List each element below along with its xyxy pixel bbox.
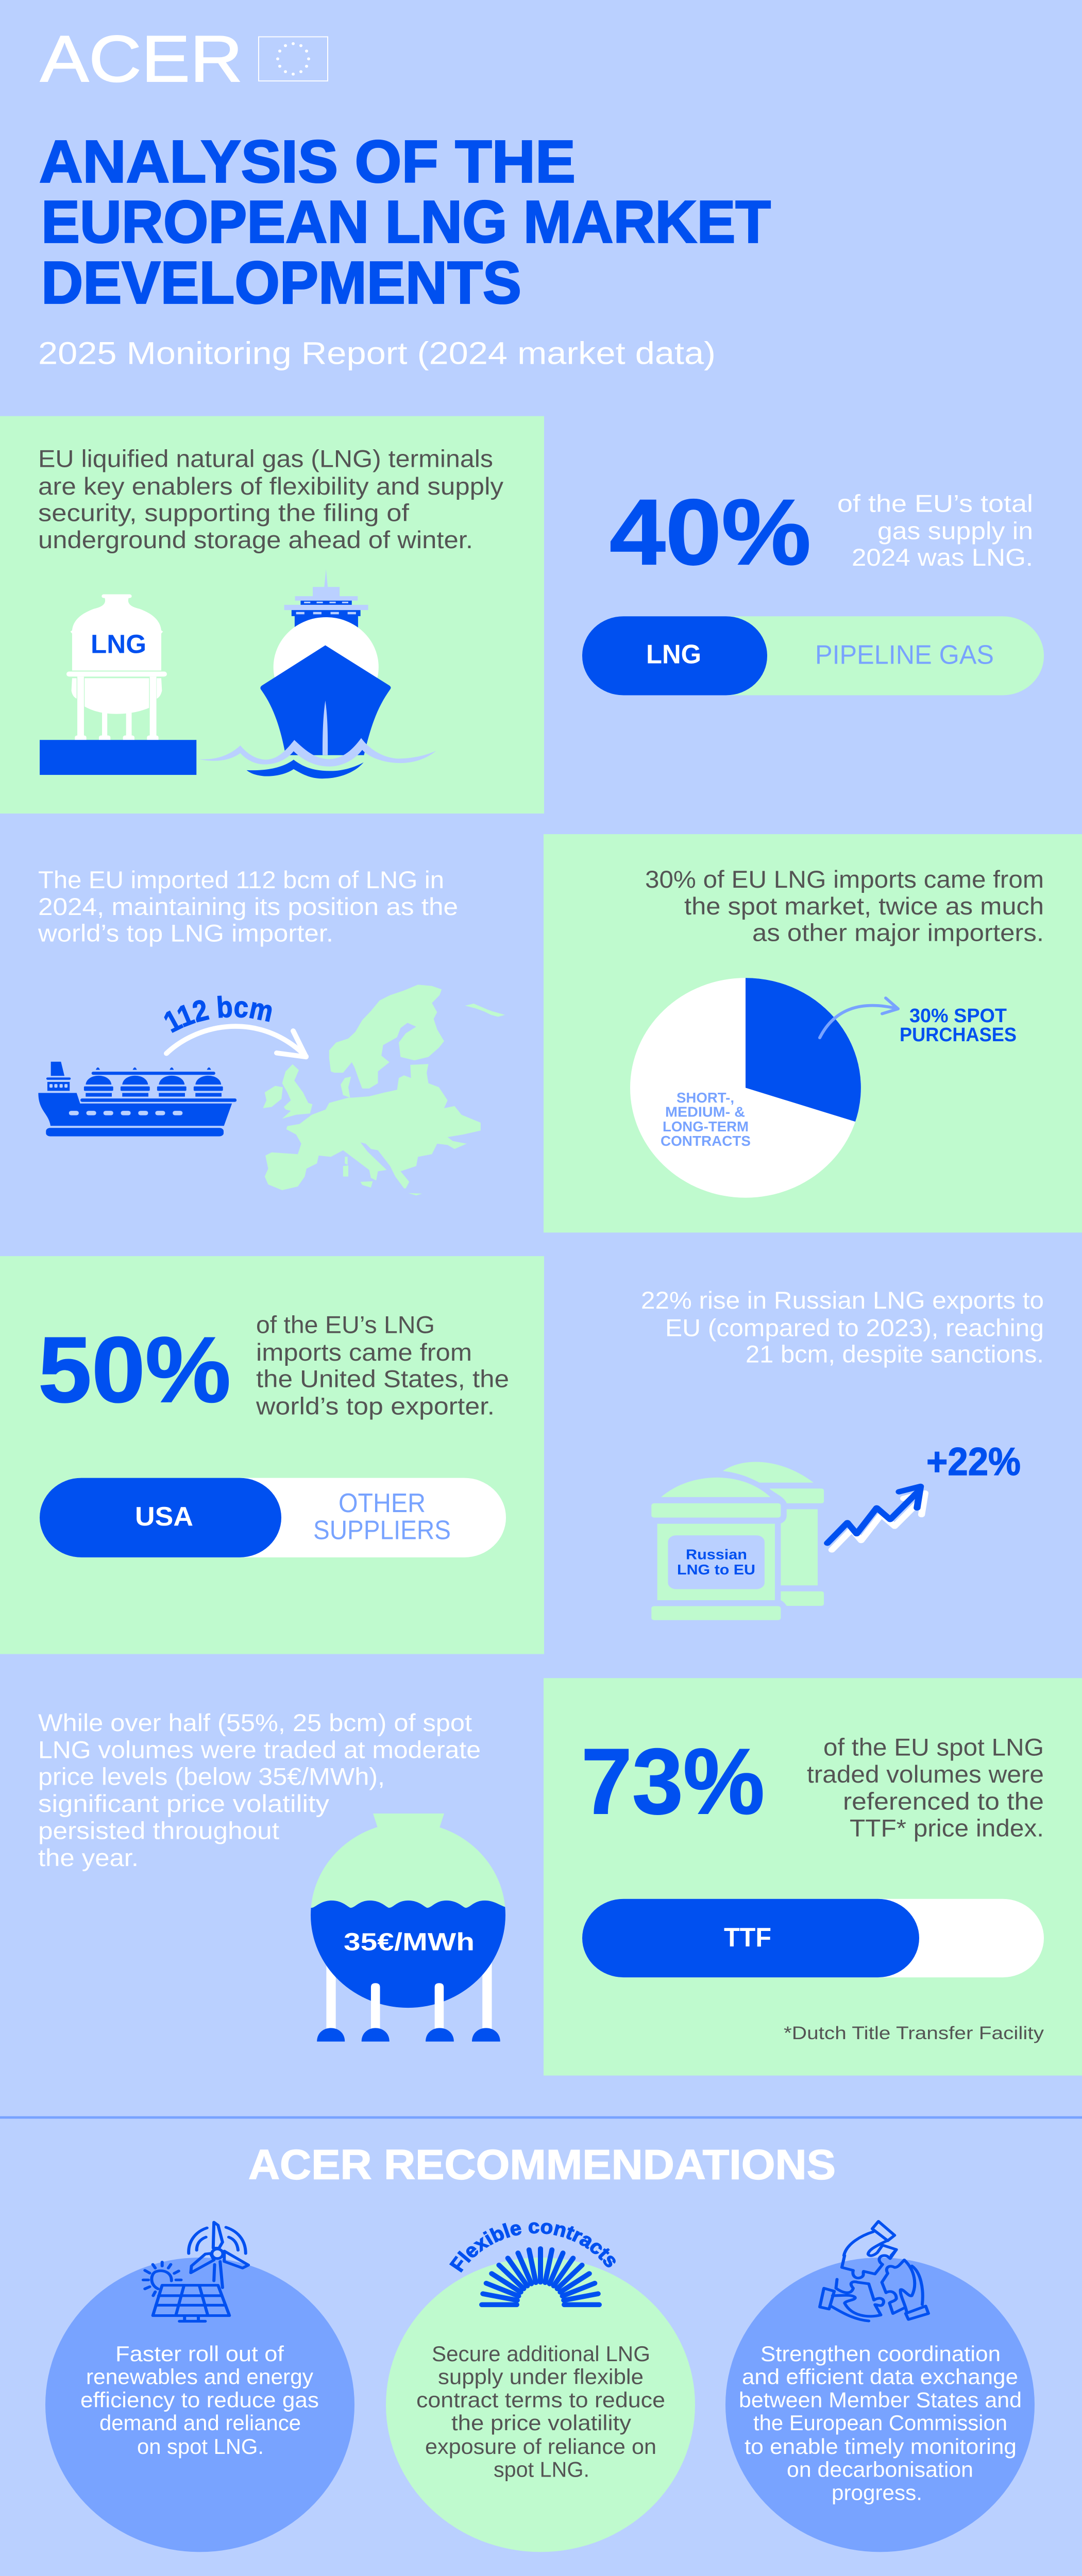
bar: USA vs other suppliers: OTHER (339, 1488, 426, 1518)
stat: 50%: 50% (38, 1318, 231, 1422)
text: Russian exports (641, 1287, 1044, 1368)
heading: ACER RECOMMENDATIONS (248, 2141, 836, 2188)
text: TTF reference: traded volumes were (807, 1761, 1044, 1788)
text (80, 2342, 319, 2459)
text: price levels (38, 1709, 481, 1872)
label: contracts: SHORT-, (677, 1090, 734, 1106)
label: Russian LNG to EU: Russian (686, 1546, 747, 1563)
text: on decarbonisation (787, 2458, 973, 2482)
stat: 40%: 40% (610, 480, 811, 584)
logo: ACER: ACER (40, 22, 243, 95)
subtitle: 2025 Monitoring Report (2024 market data) (38, 336, 716, 371)
text: share of supply: of the EU’s total (837, 490, 1033, 517)
panel: LNG terminals (0, 416, 544, 814)
text: Russian exports: 21 bcm, despite sanctions. (746, 1341, 1044, 1368)
text: renewables and energy (86, 2365, 314, 2389)
text: US imports: the United States, the (256, 1365, 509, 1393)
text: price levels: persisted throughout (38, 1818, 279, 1844)
chart: pie spot vs contracts (630, 978, 861, 1198)
icon: LNG ship front view (198, 569, 436, 778)
icon: puzzle and hands (820, 2222, 928, 2321)
label: 35€/MWh: 35€/MWh (344, 1928, 475, 1956)
text: share of supply (837, 490, 1033, 571)
text: Russian exports: 22% rise in Russian LNG exports to (641, 1287, 1044, 1314)
icon: LNG carrier ship (38, 1062, 236, 1137)
text: the price volatility (451, 2411, 632, 2435)
text: Strengthen coordination (760, 2342, 1001, 2366)
label: +22%: +22% (926, 1439, 1021, 1483)
text: exposure of reliance on (425, 2435, 656, 2459)
stat: 73%: 73% (581, 1730, 765, 1834)
text: price levels: significant price volatility (38, 1790, 330, 1818)
arrow: to spot label (820, 998, 898, 1038)
text: imports: The EU imported 112 bcm of LNG in (38, 867, 444, 894)
bar: USA vs other suppliers: USA (135, 1501, 193, 1532)
panel: spot price levels (38, 1709, 510, 2042)
map: Europe (263, 985, 505, 1195)
text: spot share: 30% of EU LNG imports came from (645, 866, 1044, 893)
panel: Russian LNG (641, 1287, 1044, 1620)
text (739, 2342, 1022, 2505)
header (38, 22, 771, 371)
label: contracts: CONTRACTS (661, 1132, 751, 1149)
title: ANALYSIS OF THE (39, 128, 576, 195)
bar: TTF share: TTF (724, 1922, 771, 1953)
text: the European Commission (753, 2411, 1007, 2435)
text: progress. (832, 2481, 922, 2505)
circle: renewables (45, 2222, 354, 2552)
label: contracts (661, 1090, 751, 1149)
text: efficiency to reduce gas (80, 2388, 319, 2412)
text: US imports: of the EU’s LNG (256, 1312, 435, 1338)
footnote: *Dutch Title Transfer Facility (784, 2023, 1044, 2043)
text: terminals: security, supporting the filing of (38, 499, 409, 527)
circle: coordination (725, 2222, 1035, 2552)
title: DEVELOPMENTS (41, 249, 521, 316)
text: spot share (645, 866, 1044, 946)
circle: flexible contracts (386, 2222, 695, 2552)
text: price levels: LNG volumes were traded at moderate (38, 1736, 481, 1764)
text: price levels: price levels (below 35€/MWh), (38, 1764, 385, 1790)
text: share of supply: gas supply in (877, 518, 1033, 545)
icon: EU flag (259, 37, 328, 81)
panel: 112 bcm imports (38, 867, 505, 1195)
text: terminals: are key enablers of flexibility and supply (38, 473, 504, 500)
text: Secure additional LNG (432, 2342, 650, 2366)
text: price levels: the year. (38, 1844, 139, 1872)
text: Russian exports: EU (compared to 2023), reaching (665, 1314, 1044, 1342)
text: between Member States and (739, 2388, 1022, 2412)
text: on spot LNG. (137, 2435, 264, 2459)
panel: USA share (0, 1256, 544, 1654)
title: EUROPEAN LNG MARKET (41, 189, 771, 256)
bar: TTF share (582, 1899, 1044, 1977)
icon: storage tanks (651, 1462, 824, 1620)
text: terminals: underground storage ahead of winter. (38, 527, 473, 554)
icon: flexible spring (482, 2249, 599, 2304)
text: to enable timely monitoring (745, 2435, 1017, 2459)
text: supply under flexible (438, 2365, 644, 2389)
text: US imports: world’s top exporter. (256, 1393, 495, 1420)
title (39, 128, 771, 316)
text: US imports: imports came from (256, 1339, 472, 1366)
icon: wind turbine and solar panel (143, 2222, 248, 2321)
bar: USA vs other suppliers: SUPPLIERS (313, 1515, 451, 1545)
icon: LNG tank (40, 595, 196, 775)
bar: USA vs other suppliers (40, 1478, 506, 1557)
text: imports (38, 867, 458, 947)
bar: LNG vs pipeline gas: LNG (646, 639, 701, 669)
label: contracts: MEDIUM- & (665, 1104, 745, 1120)
icon: LNG tank: LNG (91, 630, 146, 659)
text: TTF reference: of the EU spot LNG (823, 1734, 1044, 1761)
section: ACER recommendations (45, 2141, 1035, 2552)
label: Russian LNG to EU (677, 1546, 755, 1578)
arrow: ship to Europe (166, 1026, 306, 1057)
text: TTF reference (807, 1734, 1044, 1842)
text: imports: world’s top LNG importer. (38, 920, 333, 947)
text: US imports (256, 1312, 509, 1420)
text: spot share: the spot market, twice as much (684, 893, 1044, 920)
text: and efficient data exchange (742, 2365, 1018, 2389)
logo: ACER (40, 22, 328, 95)
label: 30% spot purchases (900, 1005, 1017, 1046)
arrow: rising trend (827, 1486, 925, 1550)
label: 30% spot purchases: 30% SPOT (909, 1005, 1007, 1027)
text: terminals (38, 446, 504, 554)
text: imports: 2024, maintaining its position as the (38, 893, 458, 921)
text: Faster roll out of (115, 2342, 284, 2366)
text: TTF reference: referenced to the (843, 1788, 1044, 1815)
text: spot share: as other major importers. (752, 920, 1044, 946)
label: Flexible contracts: Flexible contracts (449, 2222, 616, 2273)
text: share of supply: 2024 was LNG. (852, 544, 1033, 571)
text: contract terms to reduce (416, 2388, 665, 2412)
text: demand and reliance (99, 2411, 301, 2435)
text: terminals: EU liquified natural gas (LNG) terminals (38, 446, 493, 472)
label: contracts: LONG-TERM (663, 1118, 749, 1134)
label: 112 bcm: 112 bcm (164, 995, 272, 1033)
text: price levels: While over half (55%, 25 bcm) of spot (38, 1709, 472, 1737)
icon: price tank (307, 1814, 510, 2042)
text: TTF reference: TTF* price index. (850, 1815, 1044, 1842)
text: spot LNG. (494, 2458, 589, 2482)
bar: LNG vs pipeline gas: PIPELINE GAS (815, 640, 994, 670)
panel: spot market (544, 834, 1082, 1232)
bar: LNG vs pipeline gas (582, 616, 1044, 696)
label: Russian LNG to EU: LNG to EU (677, 1562, 755, 1578)
panel: 40% LNG share (582, 480, 1044, 696)
label: 30% spot purchases: PURCHASES (900, 1024, 1017, 1046)
panel: TTF index (544, 1678, 1082, 2076)
text (416, 2342, 665, 2482)
